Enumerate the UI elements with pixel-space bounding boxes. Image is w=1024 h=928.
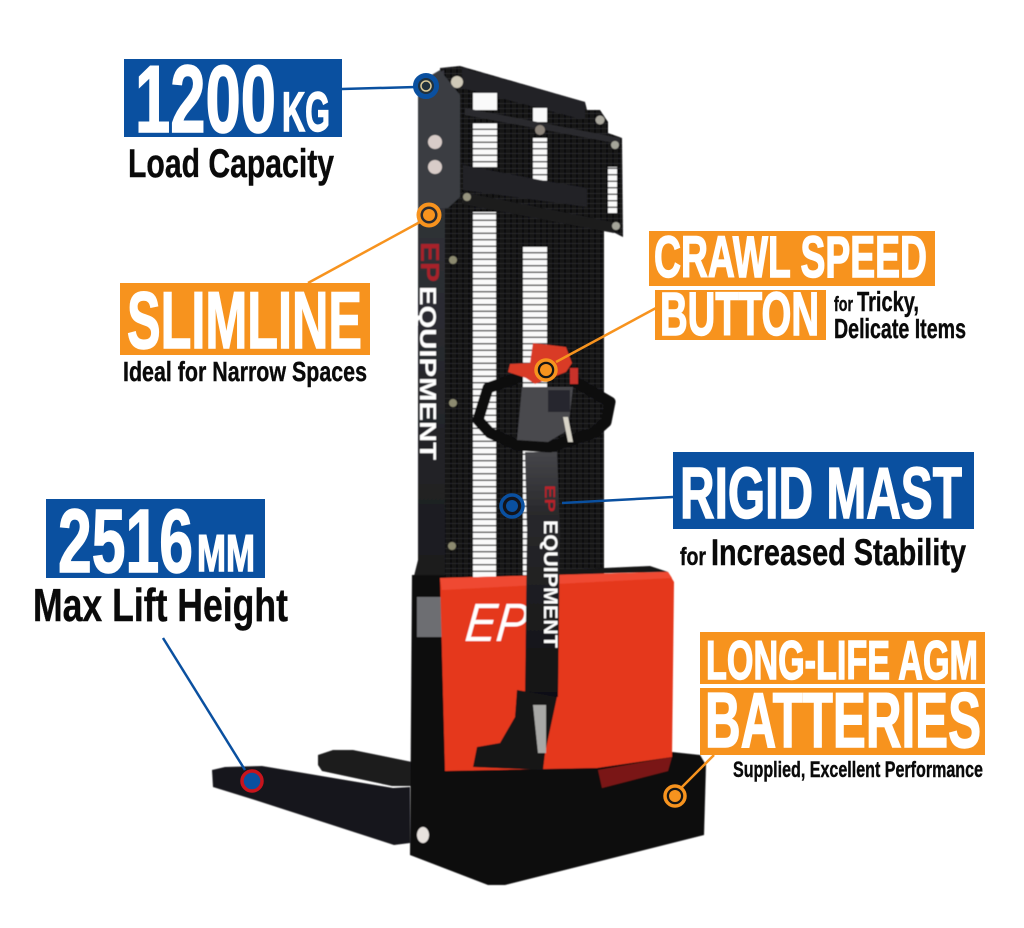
rear fork <box>318 750 412 786</box>
marker <box>501 495 523 517</box>
value 1200KG: 1200 <box>135 46 276 153</box>
control handle <box>478 343 610 447</box>
banner BUTTON <box>655 290 826 340</box>
marker <box>418 204 440 226</box>
blue banner <box>673 452 974 529</box>
mast column with EP EQUIPMENT lettering: EQUIPMENT <box>415 286 441 460</box>
caption <box>834 286 966 344</box>
connector line <box>308 222 420 283</box>
value 2516MM: 2516 <box>58 492 193 592</box>
tiller arm: EP <box>541 485 558 512</box>
hinge pin <box>417 827 429 843</box>
marker <box>416 76 436 96</box>
heading: SLIMLINE <box>127 276 362 366</box>
tiller arm <box>473 452 560 770</box>
connector line <box>556 308 656 362</box>
caption: for <box>680 543 706 571</box>
caption: Delicate Items <box>834 313 966 344</box>
mast column with EP EQUIPMENT lettering <box>413 70 460 580</box>
connector line <box>562 497 673 503</box>
connector line <box>163 638 245 770</box>
callout: load capacity: KG <box>282 80 330 143</box>
red battery cover: EP <box>463 593 531 653</box>
orange banner <box>120 283 370 355</box>
banner LONG-LIFE AGM <box>700 632 985 684</box>
connector line <box>342 87 416 89</box>
mast column with EP EQUIPMENT lettering: EP <box>415 242 445 282</box>
callout: max lift height: MM <box>197 525 255 583</box>
caption: Load Capacity <box>128 142 335 186</box>
callout: slimline <box>120 204 440 387</box>
upper carriage frame <box>440 66 623 237</box>
marker <box>665 786 685 806</box>
banner CRAWL SPEED <box>649 231 935 286</box>
stacker truck photo <box>212 66 706 885</box>
blue banner <box>124 59 342 137</box>
mast mesh backing <box>445 205 604 580</box>
callout: crawl speed button <box>536 225 966 380</box>
caption: Max Lift Height <box>33 579 288 631</box>
marker <box>536 360 556 380</box>
connector line <box>681 755 714 788</box>
banner BATTERIES <box>700 688 985 755</box>
heading line 2: BUTTON <box>660 280 819 348</box>
tiller arm: EQUIPMENT <box>539 520 560 648</box>
callout: load capacity <box>124 46 436 186</box>
blue banner <box>46 499 265 578</box>
callout: max lift height <box>33 492 288 791</box>
marker <box>242 771 262 791</box>
caption: Tricky, <box>857 286 919 317</box>
caption: Ideal for Narrow Spaces <box>123 356 367 387</box>
red battery cover <box>440 572 674 788</box>
front fork <box>212 766 410 845</box>
callout: batteries <box>665 629 985 806</box>
chassis base and column <box>410 566 706 885</box>
callout: rigid mast <box>501 452 974 573</box>
caption: for <box>834 294 853 316</box>
